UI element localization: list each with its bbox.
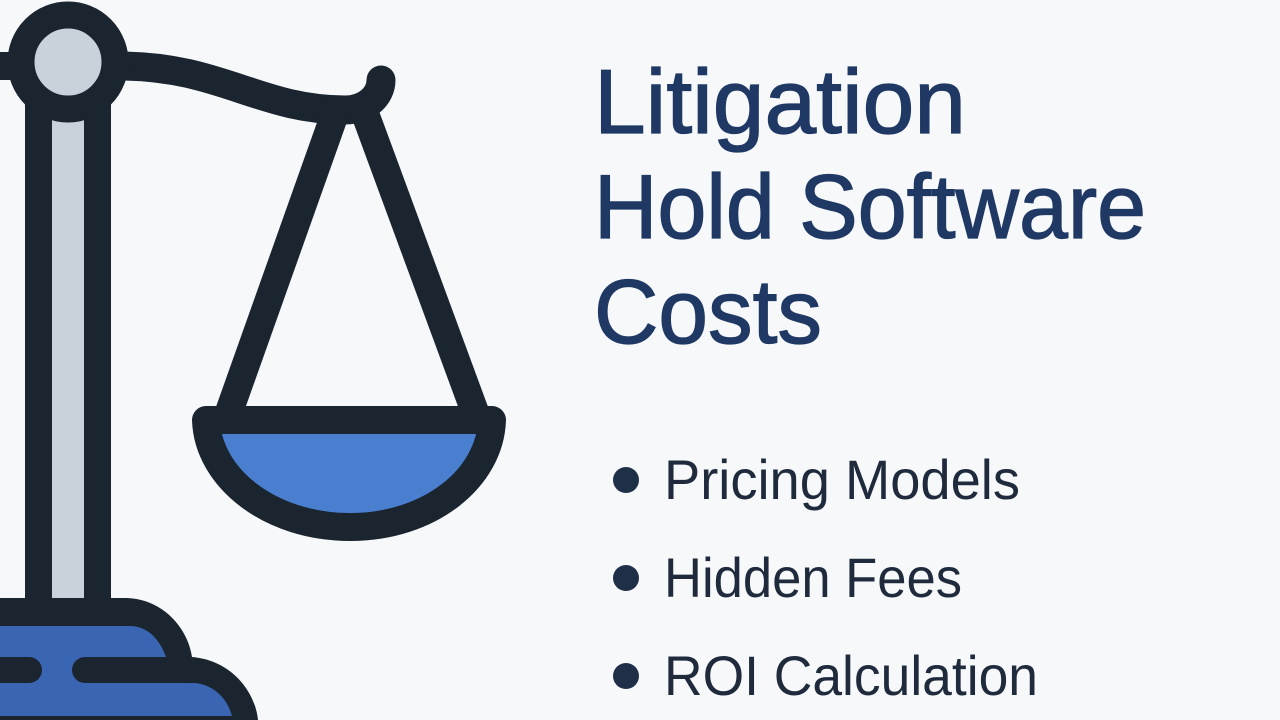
icon: scale beam xyxy=(0,52,381,110)
title: Hold Software xyxy=(594,157,1146,258)
title: Litigation xyxy=(594,52,966,153)
bullet list xyxy=(613,448,1038,707)
bullet: ROI calculation: ROI Calculation xyxy=(664,644,1038,707)
icon: scales of justice xyxy=(0,15,492,720)
icon: scale pan xyxy=(206,420,492,527)
icon: scale base xyxy=(0,598,258,720)
bullet: hidden fees: Hidden Fees xyxy=(664,546,962,609)
title: Costs xyxy=(594,262,822,363)
bullet: pricing models: Pricing Models xyxy=(664,448,1020,511)
icon: scale pole xyxy=(25,100,111,610)
icon: pan strings xyxy=(229,108,475,412)
icon: pivot circle xyxy=(21,15,115,109)
title xyxy=(594,52,1146,363)
